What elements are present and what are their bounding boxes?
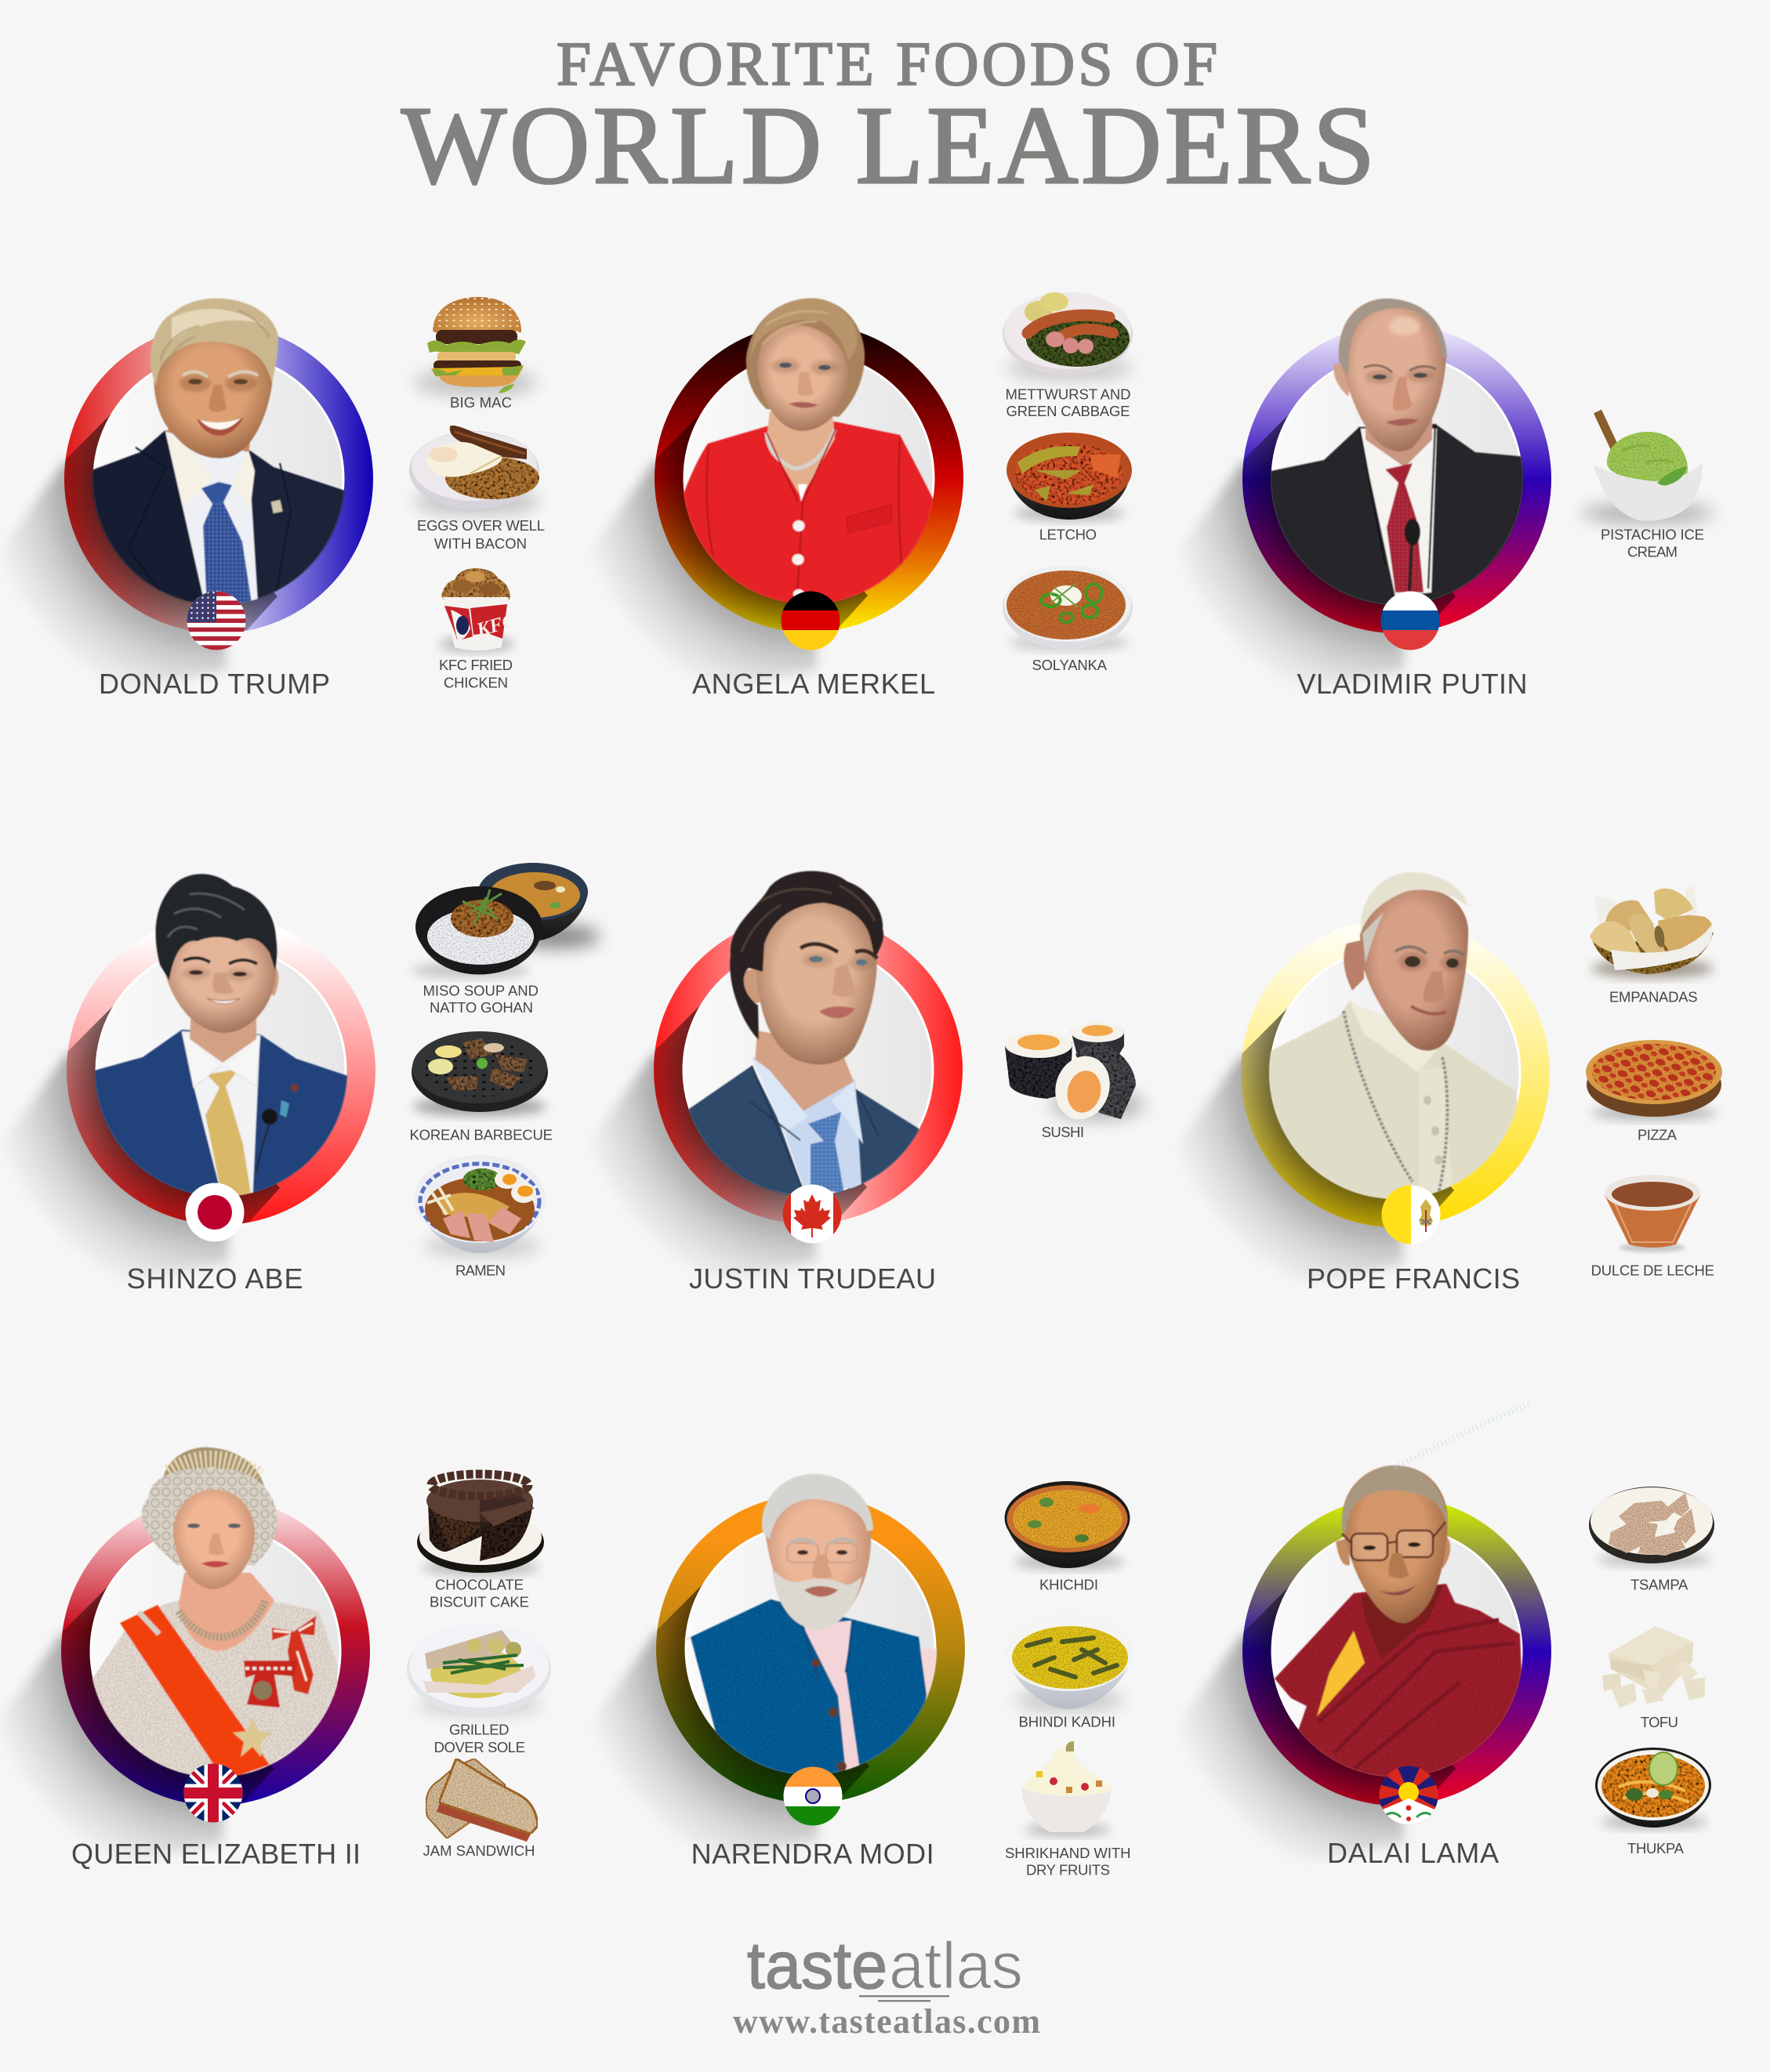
label: mettwurst and green cabbage: METTWURST AND [1005,386,1130,402]
panel: Donald Trump [0,297,545,722]
food: pizza [1586,1040,1722,1121]
label: mettwurst and green cabbage [1005,386,1130,419]
food: pistachio ice cream [1581,411,1714,523]
food: empanadas [1590,886,1714,978]
flag: Vatican [1381,1185,1441,1244]
logo: tasteatlas: taste [747,1929,887,2002]
portrait: Angela Merkel [684,298,934,611]
portrait: Donald Trump [85,299,352,612]
label: tsampa: TSAMPA [1630,1576,1688,1592]
flag: Japan [185,1183,245,1241]
food: letcho [1007,433,1132,521]
label: dulce de leche: DULCE DE LECHE [1591,1262,1714,1279]
label: empanadas: EMPANADAS [1609,989,1698,1005]
label: shrikhand with dry fruits: SHRIKHAND WITH [1005,1845,1130,1861]
logo: tasteatlas: atlas [889,1929,1023,2002]
food: chocolate biscuit cake [417,1474,544,1575]
website url: www.tasteatlas.com [733,2002,1040,2041]
label: shrikhand with dry fruits: DRY FRUITS [1026,1862,1110,1878]
flag: USA [187,591,246,650]
label: bhindi kadhi: BHINDI KADHI [1019,1714,1115,1730]
food: mettwurst and green cabbage [1003,292,1133,379]
name: Narendra Modi: NARENDRA MODI [691,1838,934,1870]
label: pistachio ice cream [1601,527,1704,560]
panel: Narendra Modi [575,1474,1133,1892]
panel: Shinzo Abe [0,863,600,1313]
panel: Queen Elizabeth II [0,1447,551,1894]
flag: United Kingdom [183,1763,243,1823]
label: KFC fried chicken [439,657,513,691]
label: KFC fried chicken: KFC FRIED [439,657,513,673]
title: WORLD LEADERS [401,83,1375,207]
label: miso soup and natto gohan [423,983,539,1016]
name: Shinzo Abe: SHINZO ABE [127,1262,303,1295]
flag: Russia [1380,591,1440,650]
label: pistachio ice cream: PISTACHIO ICE [1601,527,1704,542]
ring: white to red [0,916,375,1313]
name: Angela Merkel: ANGELA MERKEL [692,668,935,700]
panel: Angela Merkel [574,292,1133,721]
food: shrikhand with dry fruits [1021,1741,1112,1836]
label: Korean barbecue: KOREAN BARBECUE [409,1126,553,1143]
ring: red white blue [0,1497,370,1894]
label: solyanka: SOLYANKA [1032,657,1108,673]
label: thukpa: THUKPA [1627,1840,1685,1856]
flag: Tibet [1377,1764,1440,1827]
food: Big Mac [415,297,537,397]
logo: tasteatlas [747,1929,1023,2002]
label: KFC fried chicken: CHICKEN [444,674,508,691]
portrait: Shinzo Abe [92,874,350,1204]
label: chocolate biscuit cake [430,1577,529,1610]
name: Donald Trump: DONALD TRUMP [99,668,330,700]
flag: Canada [782,1184,842,1244]
panel: Vladimir Putin [1162,299,1714,722]
ring: red white red [573,915,963,1313]
food: tofu [1602,1626,1705,1708]
label: Big Mac: BIG MAC [450,394,512,411]
ring: white to yellow [1160,918,1550,1316]
label: eggs over well with bacon: WITH BACON [434,535,527,552]
name: Queen Elizabeth II: QUEEN ELIZABETH II [71,1838,361,1870]
food: Korean barbecue [412,1031,548,1116]
panel: Dalai Lama [1162,1465,1714,1894]
label: sushi: SUSHI [1042,1124,1084,1140]
name: Pope Francis: POPE FRANCIS [1307,1262,1520,1295]
label: pizza: PIZZA [1638,1126,1678,1143]
food: KFC fried chicken [439,568,518,652]
label: miso soup and natto gohan: NATTO GOHAN [430,999,533,1016]
portrait: Pope Francis [1262,872,1529,1206]
label: khichdi: KHICHDI [1039,1577,1098,1593]
portrait: Justin Trudeau [683,871,926,1203]
label: miso soup and natto gohan: MISO SOUP AND [423,983,539,998]
ring: lime blue red [1162,1497,1551,1894]
label: letcho: LETCHO [1039,527,1097,542]
food: solyanka [1003,565,1133,650]
name: Dalai Lama: DALAI LAMA [1327,1837,1499,1869]
label: eggs over well with bacon: EGGS OVER WELL [417,517,545,534]
food: thukpa [1595,1748,1711,1829]
title: FAVORITE FOODS OF [557,31,1217,99]
label: grilled Dover sole: GRILLED [449,1722,510,1738]
ring: saffron to green [575,1494,965,1892]
food: KFC fried chicken: KFC [473,610,518,641]
faint paint speck [1395,1404,1529,1467]
label: grilled Dover sole [434,1722,525,1755]
name: Justin Trudeau: JUSTIN TRUDEAU [689,1262,936,1295]
ring: black red gold [574,324,963,721]
food: khichdi [1005,1481,1130,1570]
food: dulce de leche [1605,1175,1700,1252]
label: shrikhand with dry fruits [1005,1845,1130,1878]
panel: Pope Francis [1184,871,1722,1288]
label: ramen: RAMEN [455,1262,506,1279]
portrait: Vladimir Putin [1264,299,1526,612]
portrait: Dalai Lama [1275,1465,1526,1784]
food: jam sandwich [426,1759,538,1842]
label: mettwurst and green cabbage: GREEN CABBAGE [1007,403,1130,419]
portrait: Narendra Modi [681,1474,940,1782]
label: tofu: TOFU [1641,1714,1678,1730]
food: bhindi kadhi [1004,1613,1133,1710]
ring: red to blue [0,324,373,722]
food: sushi [1005,1022,1144,1126]
food: miso soup and natto gohan [412,863,600,978]
food: tsampa [1589,1487,1714,1567]
portrait: Queen Elizabeth II [90,1447,338,1784]
label: chocolate biscuit cake: CHOCOLATE [435,1577,524,1593]
label: chocolate biscuit cake: BISCUIT CAKE [430,1594,529,1610]
label: grilled Dover sole: DOVER SOLE [434,1739,525,1755]
ring: white blue red [1162,324,1551,722]
flag: India [783,1766,843,1827]
name: Vladimir Putin: VLADIMIR PUTIN [1297,668,1527,700]
food: eggs over well with bacon [409,426,539,514]
label: jam sandwich: JAM SANDWICH [423,1842,535,1859]
food: grilled Dover sole [407,1623,551,1715]
panel: Justin Trudeau [573,871,1144,1313]
flag: Germany [781,591,840,650]
food: ramen [414,1155,546,1255]
label: eggs over well with bacon [417,517,545,552]
label: pistachio ice cream: CREAM [1627,544,1678,560]
